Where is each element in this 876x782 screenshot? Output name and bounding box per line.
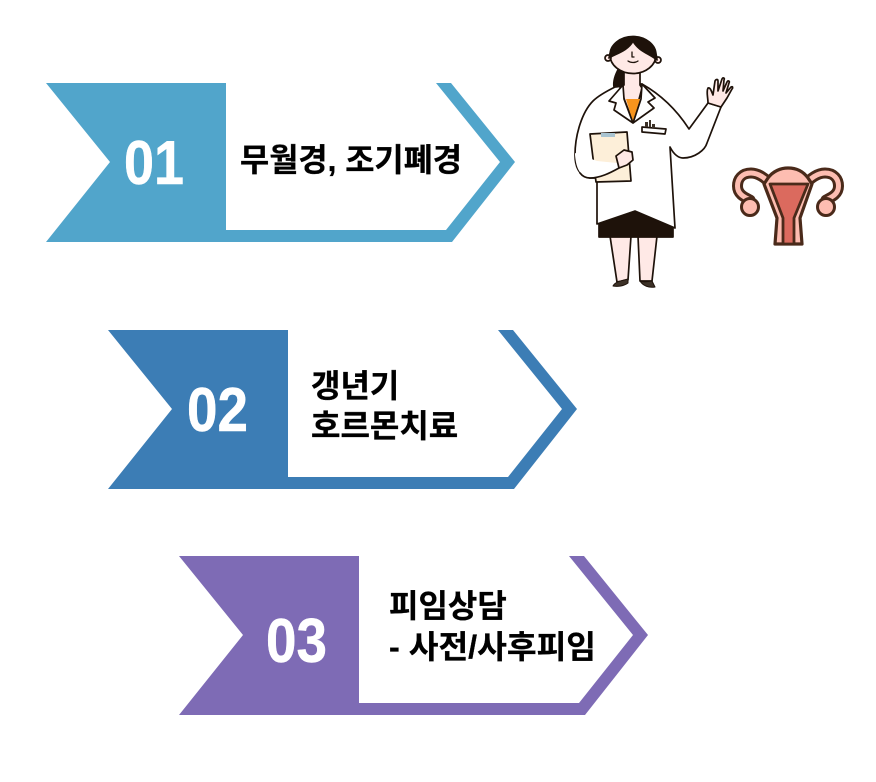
ponytail bbox=[614, 68, 624, 87]
label: 피임상담 - 사전/사후피임: - 사전/사후피임 bbox=[389, 629, 596, 665]
panel: 01 arrow bbox=[46, 83, 515, 242]
hair bbox=[609, 37, 657, 60]
panel: 03 arrow bbox=[179, 556, 648, 715]
skirt bbox=[599, 211, 673, 237]
arrow shape 02 bbox=[108, 330, 577, 489]
face bbox=[610, 36, 656, 74]
ears bbox=[605, 55, 611, 61]
holding hand bbox=[616, 150, 633, 168]
icon: uterus bbox=[738, 168, 838, 244]
number 03: 03 bbox=[266, 607, 327, 676]
number 01: 01 bbox=[124, 129, 184, 198]
panel: 02 arrow bbox=[108, 330, 577, 489]
label: 피임상담 - 사전/사후피임: 피임상담 bbox=[389, 588, 507, 624]
clipboard bbox=[590, 132, 631, 182]
clipboard clip bbox=[601, 133, 615, 137]
ovaries bbox=[742, 198, 758, 216]
neck and chest bbox=[620, 70, 642, 122]
shoes bbox=[613, 279, 655, 287]
raised hand bbox=[707, 78, 733, 107]
collar bbox=[609, 84, 655, 123]
uterus cavity bbox=[770, 184, 808, 244]
arrow shape 01 bbox=[46, 83, 515, 242]
number 02: 02 bbox=[187, 376, 248, 445]
orange blouse bbox=[626, 99, 640, 122]
label: 갱년기 호르몬치료: 갱년기 bbox=[311, 368, 399, 404]
sleeve front bbox=[575, 153, 619, 178]
pocket badge bbox=[642, 127, 666, 134]
icon: doctor illustration bbox=[575, 36, 733, 287]
label: 갱년기 호르몬치료: 호르몬치료 bbox=[311, 408, 458, 444]
coat bbox=[575, 84, 721, 228]
arrow shape 03 bbox=[179, 556, 648, 715]
pens bbox=[645, 120, 655, 128]
uterus body bbox=[764, 168, 812, 244]
fallopian tubes outline bbox=[738, 173, 838, 200]
legs bbox=[610, 236, 657, 282]
fallopian tubes fill bbox=[738, 173, 838, 200]
eyes nose mouth bbox=[628, 52, 638, 62]
label: 무월경, 조기폐경: 무월경, 조기폐경 bbox=[240, 142, 462, 178]
